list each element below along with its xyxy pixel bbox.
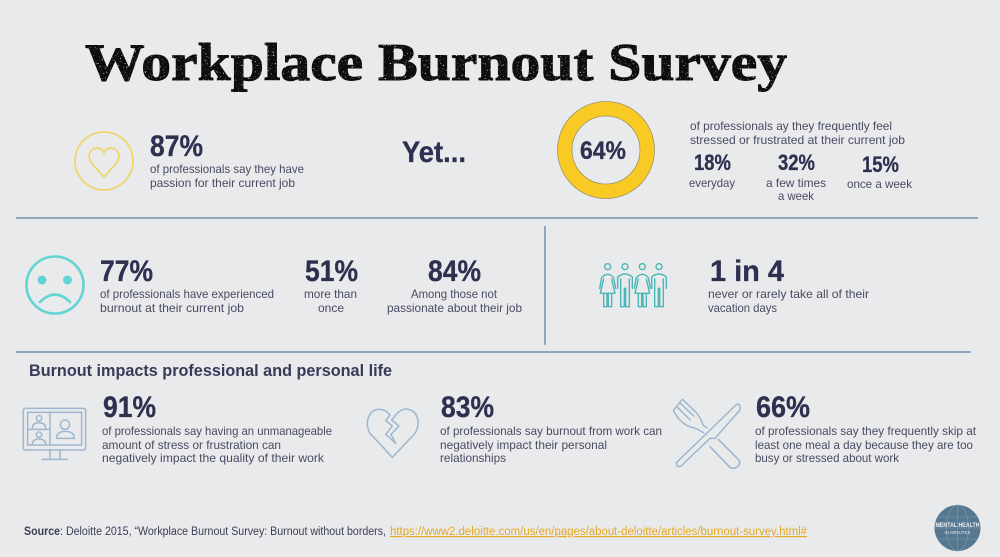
chart: 64% donut <box>558 102 654 198</box>
stat: 51% more than once: more than <box>304 288 357 301</box>
icon: heart in circle <box>75 132 133 190</box>
icon: broken heart <box>367 409 418 457</box>
stat: 51% more than once: once <box>318 302 344 315</box>
stat: 91%: 91% <box>103 391 156 424</box>
panel: burnout stat <box>26 255 522 315</box>
icon: video call monitor <box>23 408 86 459</box>
text: quality description: amount of stress or frustration can <box>102 439 281 452</box>
text: stress description: stressed or frustrated at their current job <box>690 134 906 147</box>
text: meals description: least one meal a day because they are too <box>755 439 973 452</box>
stat: 84% not passionate: passionate about their job <box>387 302 522 315</box>
icon: crossed fork and knife <box>673 399 740 468</box>
stat: 84% not passionate <box>387 255 522 315</box>
chart: 64% donut: 64% <box>580 137 626 165</box>
text: relationships description: negatively impact their personal <box>440 439 607 452</box>
logo badge: MENTAL HEALTH <box>936 522 980 529</box>
text: burnout description: burnout at their current job <box>100 302 245 315</box>
stat: 18% everyday: 18% <box>694 150 731 175</box>
stat: 15% once a week <box>847 152 912 191</box>
stat: 18% everyday <box>689 150 735 190</box>
text: relationships description <box>440 425 662 465</box>
text: meals description: of professionals say they frequently skip at <box>755 425 977 438</box>
text: quality description: of professionals say having an unmanageable <box>102 425 332 438</box>
text: passion description: passion for their current job <box>150 177 296 190</box>
text: burnout description: of professionals have experienced <box>100 288 274 301</box>
stat: 66%: 66% <box>756 391 810 424</box>
panel: passion stat <box>75 130 304 190</box>
text: passion description <box>150 163 304 190</box>
text: burnout description <box>100 288 274 315</box>
stat: 15% once a week: once a week <box>847 178 912 191</box>
text: stress description <box>690 120 906 147</box>
stat: 77%: 77% <box>100 255 153 288</box>
stat: 18% everyday: everyday <box>689 177 735 190</box>
stat: 51% more than once <box>304 255 358 315</box>
stat: 51% more than once: 51% <box>305 255 358 288</box>
stat: 87%: 87% <box>150 130 203 163</box>
stat: 83%: 83% <box>441 391 494 424</box>
source citation <box>24 526 808 538</box>
stat: 32% a few times a week: 32% <box>778 150 815 175</box>
panel: relationships <box>367 391 662 465</box>
icon: sad face <box>26 256 84 314</box>
stat: 32% a few times a week: a week <box>778 190 814 203</box>
stat: 15% once a week: 15% <box>862 152 899 177</box>
text: vacation description <box>708 288 869 315</box>
text: passion description: of professionals say they have <box>150 163 304 176</box>
text: quality description: negatively impact the quality of their work <box>102 452 324 465</box>
heading: Yet...: Yet... <box>402 136 466 169</box>
text: vacation description: never or rarely take all of their <box>708 288 869 301</box>
source citation: Source: Deloitte 2015, “Workplace Burnout Survey: Burnout without borders, <box>24 526 386 538</box>
stat: 84% not passionate: 84% <box>428 255 481 288</box>
panel: vacation stat <box>600 255 869 315</box>
panel: skipped meals <box>673 391 977 468</box>
stat: 32% a few times a week <box>766 150 826 203</box>
text: relationships description: of professionals say burnout from work can <box>440 425 662 438</box>
stat: 32% a few times a week: a few times <box>766 177 826 190</box>
text: vacation description: vacation days <box>708 302 777 315</box>
text: meals description: busy or stressed about work <box>755 452 899 465</box>
source citation: https://www2.deloitte.com/us/en/pages/about-deloitte/articles/burnout-survey.html# <box>390 526 808 538</box>
stat: 1 in 4: 1 in 4 <box>710 255 784 288</box>
panel: stress stat <box>558 102 912 203</box>
heading: burnout impacts: Burnout impacts professional and personal life <box>29 362 392 380</box>
title: Workplace Burnout Survey <box>85 34 787 92</box>
logo badge <box>934 505 980 551</box>
text: stress description: of professionals ay they frequently feel <box>690 120 892 133</box>
text: meals description <box>755 425 977 465</box>
text: relationships description: relationships <box>440 452 506 465</box>
icon: four people <box>600 264 666 307</box>
logo badge: IN MINUTES <box>944 530 971 535</box>
stat: 84% not passionate: Among those not <box>411 288 498 301</box>
text: quality description <box>102 425 332 465</box>
panel: quality of work <box>23 391 332 465</box>
